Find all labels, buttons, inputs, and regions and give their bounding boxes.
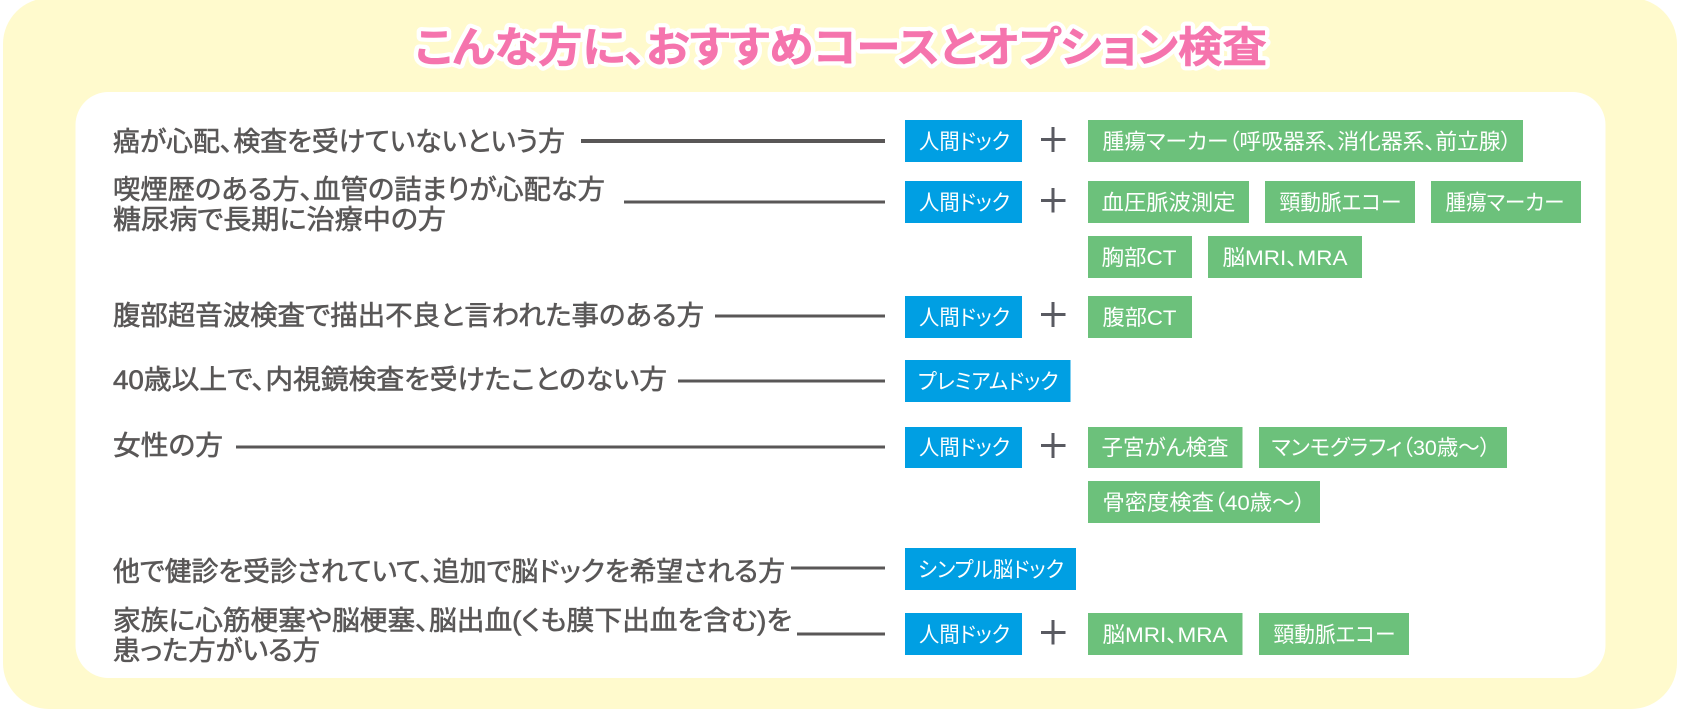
- row 5 option: bone density: [1088, 481, 1320, 523]
- row 2 option: chest CT: [1088, 236, 1192, 278]
- row 6 course: [905, 548, 1076, 590]
- row 7 label: 患った方がいる方: [113, 636, 320, 666]
- row 7 label: 家族に心筋梗塞や脳梗塞、脳出血(くも膜下出血を含む)を: [113, 606, 792, 636]
- row 3 course: 人間ドック: [919, 306, 1010, 330]
- row 5 course: 人間ドック: [919, 436, 1010, 460]
- row 5 label: 女性の方: [113, 431, 223, 461]
- row 3 label: 腹部超音波検査で描出不良と言われた事のある方: [113, 301, 704, 331]
- row 3: abdominal ultrasound: [113, 296, 1192, 338]
- row 7 course: [905, 613, 1022, 655]
- row 2 option: chest CT: 胸部CT: [1102, 246, 1176, 270]
- row 2 option: tumor marker: [1431, 181, 1581, 223]
- row 6: brain dock: [113, 548, 1076, 590]
- row 4 course: プレミアムドック: [918, 370, 1058, 394]
- panel: white content card: [76, 92, 1606, 678]
- row 1 option: 腫瘍マーカー（呼吸器系、消化器系、前立腺）: [1102, 130, 1512, 154]
- row 5 option: mammography: マンモグラフィ（30歳～）: [1272, 436, 1490, 460]
- row 2 connector line: [624, 200, 885, 204]
- row 1: cancer check: [113, 120, 1523, 162]
- row 2 course: [905, 181, 1022, 223]
- row 3 plus icon: [1041, 302, 1066, 327]
- row 4 connector line: [678, 380, 885, 382]
- row 1 option: [1088, 120, 1523, 162]
- row 2 option: carotid echo: [1265, 181, 1415, 223]
- row 7 plus icon: [1041, 620, 1066, 644]
- row 5 option: cervical: 子宮がん検査: [1102, 436, 1228, 460]
- row 3 option: [1088, 296, 1192, 338]
- row 2 label: [113, 175, 605, 235]
- row 2 option: carotid echo: 頸動脈エコー: [1280, 191, 1402, 215]
- row 4 course: [905, 360, 1070, 402]
- title: こんな方に、おすすめコースとオプション検査: [415, 24, 1267, 71]
- row 2 option: pulse wave: 血圧脈波測定: [1102, 191, 1236, 215]
- row 4: endoscopy: [113, 360, 1070, 402]
- row 7 course: 人間ドック: [919, 623, 1010, 647]
- row 3 connector line: [715, 314, 885, 318]
- row 7 option: carotid echo: [1259, 613, 1409, 655]
- row 5 connector line: [236, 446, 885, 448]
- row 2 label: 糖尿病で長期に治療中の方: [113, 205, 446, 235]
- row 7: family history: [113, 606, 1409, 666]
- row 7 option: carotid echo: 頸動脈エコー: [1274, 623, 1396, 647]
- row 7 connector line: [797, 632, 885, 636]
- row 2 course: 人間ドック: [919, 191, 1010, 215]
- row 2 option: pulse wave: [1088, 181, 1249, 223]
- row 3 option: 腹部CT: [1102, 306, 1176, 330]
- row 5 option: cervical: [1088, 427, 1242, 468]
- row 1 connector line: [581, 139, 885, 143]
- row 1 label: 癌が心配、検査を受けていないという方: [113, 127, 565, 157]
- row 5: women: [113, 427, 1507, 523]
- row 5 option: mammography: [1259, 427, 1507, 468]
- row 2 option: brain MRI: [1208, 236, 1362, 278]
- row 1 course: 人間ドック: [919, 130, 1010, 154]
- row 7 option: brain MRI: 脳MRI、MRA: [1102, 623, 1228, 647]
- row 6 connector line: [791, 566, 885, 570]
- row 6 course: シンプル脳ドック: [918, 558, 1064, 582]
- row 1 course: [905, 120, 1022, 162]
- row 5 plus icon: [1041, 433, 1066, 458]
- row 5 course: [905, 427, 1022, 468]
- row 7 option: brain MRI: [1088, 613, 1242, 655]
- row 2 option: tumor marker: 腫瘍マーカー: [1446, 191, 1564, 215]
- row 7 label: [113, 606, 792, 666]
- row 2 plus icon: [1041, 188, 1066, 212]
- row 3 course: [905, 296, 1022, 338]
- row 1 plus icon: [1041, 127, 1066, 152]
- row 6 label: 他で健診を受診されていて、追加で脳ドックを希望される方: [113, 557, 785, 587]
- row 2 option: brain MRI: 脳MRI、MRA: [1222, 246, 1348, 270]
- row 5 option: bone density: 骨密度検査（40歳～）: [1102, 491, 1306, 515]
- row 2: smoking and diabetes: [113, 175, 1581, 278]
- title: こんな方に、おすすめコースとオプション検査: [415, 24, 1267, 71]
- row 4 label: 40歳以上で、内視鏡検査を受けたことのない方: [113, 365, 667, 395]
- row 2 label: 喫煙歴のある方、血管の詰まりが心配な方: [113, 175, 605, 205]
